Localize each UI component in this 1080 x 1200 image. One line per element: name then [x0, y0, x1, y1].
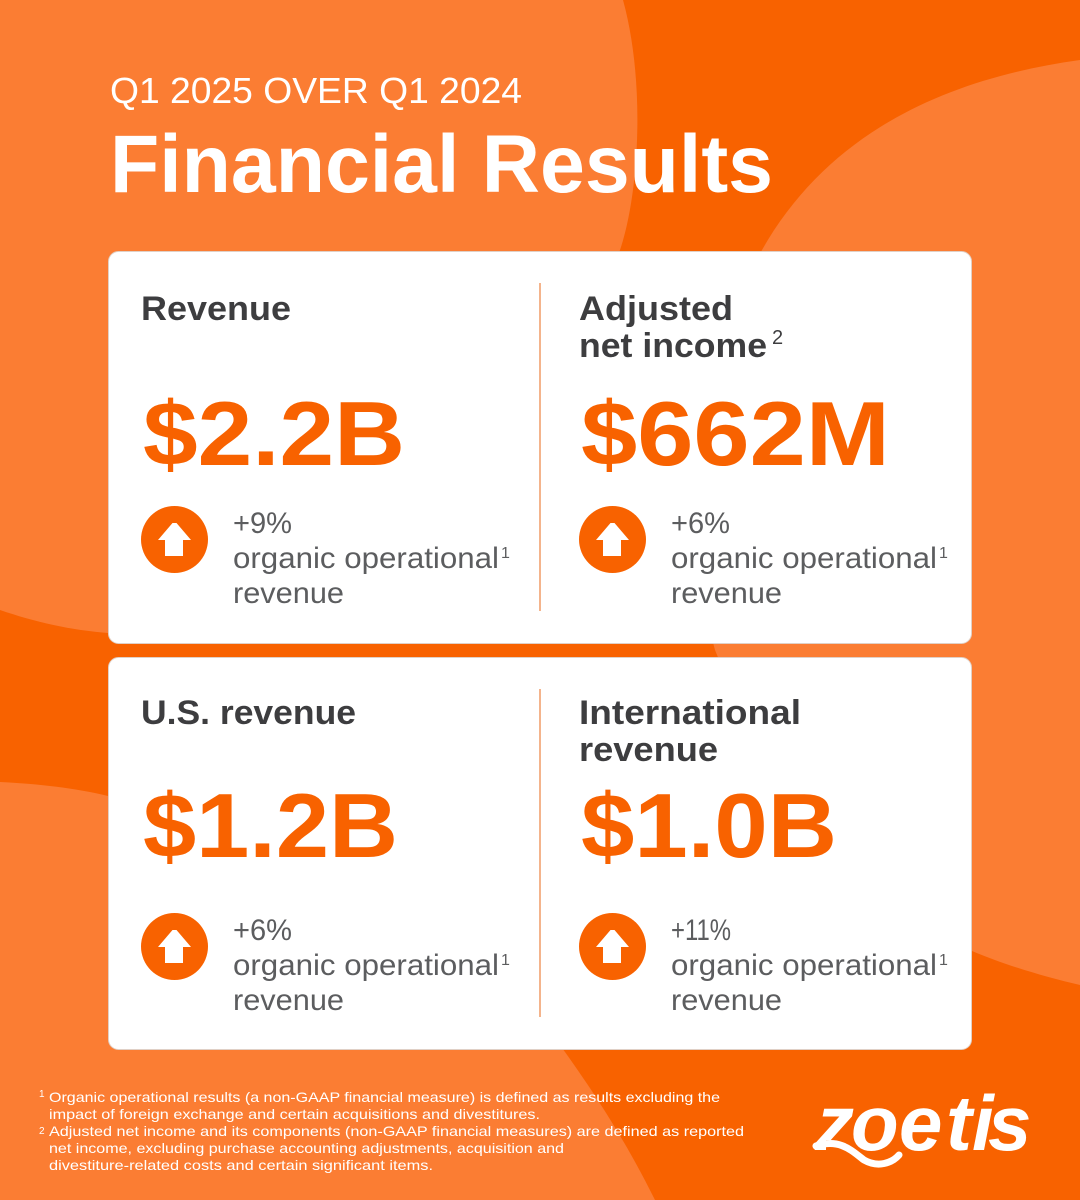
value: revenue: $2.2B: [143, 384, 405, 485]
heading: international revenue: revenue: [579, 731, 718, 769]
text: adjusted net income growth: 1: [939, 545, 948, 562]
heading: adjusted net income: [579, 290, 783, 365]
text: international revenue growth: organic operational: [671, 949, 937, 982]
heading: international revenue: International: [579, 694, 801, 732]
icon: up arrow: [141, 913, 208, 980]
text: revenue growth: revenue: [233, 577, 344, 610]
text: U.S. revenue growth: organic operational: [233, 949, 499, 982]
value: international revenue: $1.0B: [581, 776, 837, 877]
text: international revenue growth: revenue: [671, 984, 782, 1017]
heading: period: Q1 2025 OVER Q1 2024: [110, 70, 522, 111]
value: U.S. revenue: $1.2B: [143, 776, 398, 877]
logo: zoetis: zoetis: [814, 1079, 1031, 1167]
panel: top results card: [108, 252, 972, 644]
heading: adjusted net income: net income: [579, 327, 767, 365]
text: adjusted net income growth: +6%: [671, 507, 730, 540]
heading: adjusted net income: Adjusted: [579, 290, 733, 328]
text: U.S. revenue growth: revenue: [233, 984, 344, 1017]
heading: U.S. revenue: U.S. revenue: [141, 694, 356, 732]
text: international revenue growth: [671, 914, 948, 1017]
footnotes: divestiture-related costs and certain significant items.: [49, 1157, 433, 1173]
text: revenue growth: +9%: [233, 507, 292, 540]
panel: bottom results card: [108, 658, 972, 1050]
icon: up arrow: [579, 506, 646, 573]
text: adjusted net income growth: revenue: [671, 577, 782, 610]
text: adjusted net income growth: organic operational: [671, 542, 937, 575]
text: U.S. revenue growth: 1: [501, 952, 510, 969]
heading: adjusted net income: 2: [772, 327, 783, 349]
heading: revenue: Revenue: [141, 290, 291, 328]
text: revenue growth: [233, 507, 510, 610]
text: adjusted net income growth: [671, 507, 948, 610]
footnotes: Organic operational results (a non-GAAP financial measure) is defined as results excluding the: [49, 1089, 720, 1105]
heading: international revenue: [579, 694, 801, 769]
text: revenue growth: 1: [501, 545, 510, 562]
footnotes: 2: [39, 1126, 45, 1137]
icon: up arrow: [141, 506, 208, 573]
footnotes: impact of foreign exchange and certain acquisitions and divestitures.: [49, 1106, 540, 1122]
text: international revenue growth: +11%: [671, 914, 731, 947]
footnotes: 1: [39, 1089, 45, 1100]
value: adjusted net income: $662M: [581, 384, 890, 485]
text: U.S. revenue growth: +6%: [233, 914, 292, 947]
footnotes: Adjusted net income and its components (non-GAAP financial measures) are defined as reported: [49, 1123, 744, 1139]
text: international revenue growth: 1: [939, 952, 948, 969]
footnotes: [39, 1089, 744, 1173]
icon: up arrow: [579, 913, 646, 980]
footnotes: net income, excluding purchase accounting adjustments, acquisition and: [49, 1140, 564, 1156]
text: U.S. revenue growth: [233, 914, 510, 1017]
text: revenue growth: organic operational: [233, 542, 499, 575]
title: Financial Results: [110, 119, 773, 210]
